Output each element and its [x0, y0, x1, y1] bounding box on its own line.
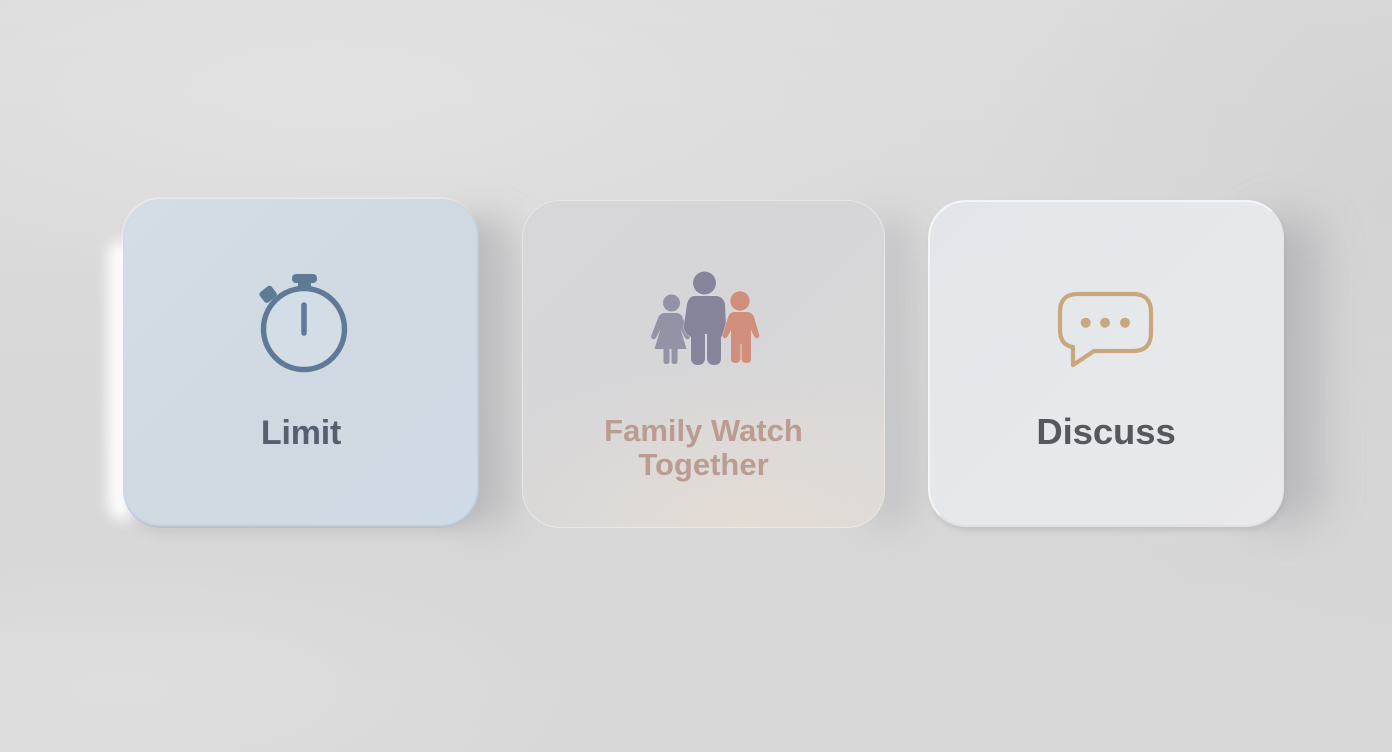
label: Limit: Limit [261, 414, 341, 452]
panel: family watch together card [522, 200, 885, 528]
icon part: child [723, 291, 759, 363]
panel: limit card [123, 199, 479, 528]
icon part: girl [651, 294, 690, 364]
icon: speech bubble [1058, 292, 1154, 368]
icon part: adult [684, 272, 726, 365]
panel: discuss card [928, 200, 1284, 527]
label: Family Watch Together [604, 413, 803, 482]
label: Family Watch Together: Family Watch [604, 413, 803, 448]
label: Discuss: Discuss [1036, 411, 1176, 452]
icon: family [651, 272, 760, 365]
icon: stopwatch [259, 274, 348, 372]
label: Family Watch Together: Together [638, 447, 769, 482]
